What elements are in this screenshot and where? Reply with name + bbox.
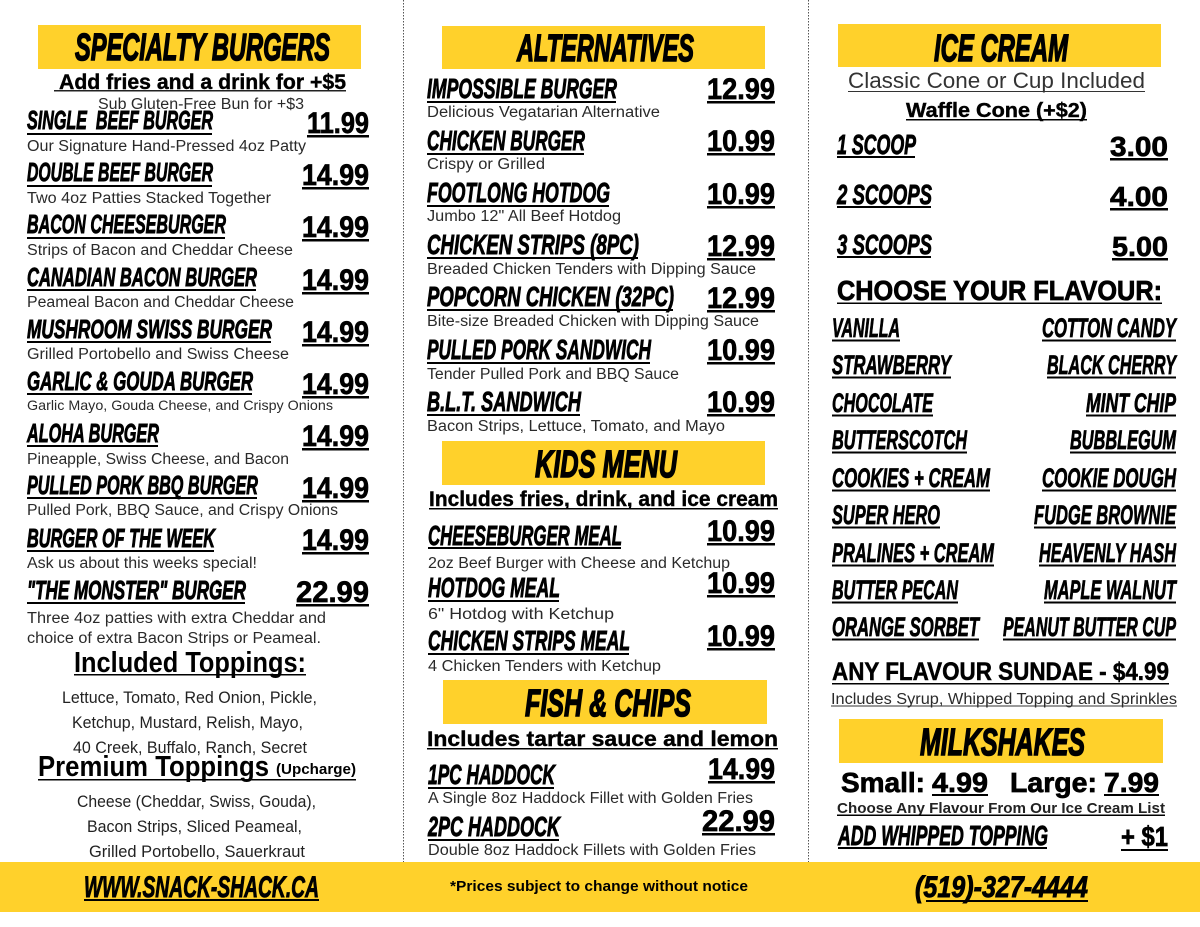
heading: specialty burgers [38,25,361,69]
item: chicken strips: Breaded Chicken Tenders with Dipping Sauce [427,261,756,278]
item: 2pc haddock: 22.99 [702,805,775,838]
item: burger of the week [27,524,369,572]
item: pulled pork sandwich [427,334,775,383]
item: the monster burger: choice of extra Bacon Strips or Peameal. [27,630,321,647]
item: popcorn chicken [427,281,775,330]
item: double beef burger [27,159,369,207]
item: single beef burger: Our Signature Hand-Pressed 4oz Patty [27,138,306,155]
item: single beef burger: 11.99 [307,107,369,140]
item: chicken strips meal: 10.99 [707,620,775,653]
item: impossible burger [427,73,775,121]
item: garlic and gouda burger: Garlic Mayo, Gouda Cheese, and Crispy Onions [27,397,333,413]
heading: ice cream: ICE CREAM [934,28,1069,70]
offer: any flavour sundae: ANY FLAVOUR SUNDAE - $4.99 [832,658,1169,686]
item: burger of the week: 14.99 [302,524,369,557]
item: pulled pork bbq burger: PULLED PORK BBQ BURGER [27,472,258,500]
text: included toppings list: Ketchup, Mustard, Relish, Mayo, [72,714,303,732]
price row: 2 scoops: 2 SCOOPS [836,179,932,210]
item: double beef burger: DOUBLE BEEF BURGER [27,159,213,187]
item: impossible burger: IMPOSSIBLE BURGER [427,73,617,104]
item: mushroom swiss burger [27,316,369,363]
item: blt sandwich: 10.99 [707,386,775,419]
heading: ice cream [838,24,1161,70]
item: pulled pork bbq burger: 14.99 [302,472,369,505]
note: kids meals include: Includes fries, drink, and ice cream [429,488,778,511]
price row: 1 scoop [837,129,1168,162]
item: canadian bacon burger: Peameal Bacon and Cheddar Cheese [27,294,294,311]
item: 1pc haddock [428,753,775,807]
note: add fries and a drink: Add fries and a drink for +$5 [59,71,346,94]
item: burger of the week: BURGER OF THE WEEK [27,525,216,553]
footer: phone number: (519)-327-4444 [915,871,1088,904]
heading: included toppings: Included Toppings: [74,647,306,679]
heading: premium toppings: (Upcharge) [276,761,356,778]
list: flavours left column: COOKIES + CREAM [832,463,990,493]
item: mushroom swiss burger: 14.99 [302,316,369,349]
item: pulled pork sandwich: PULLED PORK SANDWICH [427,334,652,365]
item: aloha burger: 14.99 [302,420,369,453]
heading: milkshakes: MILKSHAKES [920,722,1085,764]
list: flavours left column: PRALINES + CREAM [832,538,994,568]
item: hotdog meal: 6" Hotdog with Ketchup [428,606,614,623]
item: chicken burger: Crispy or Grilled [427,156,545,173]
item: garlic and gouda burger: 14.99 [302,368,369,401]
item: 1pc haddock: 14.99 [708,753,775,786]
heading: kids menu [442,441,765,486]
note: gluten-free bun: Sub Gluten-Free Bun for +$3 [98,96,304,113]
note: choose any flavour: Choose Any Flavour From Our Ice Cream List [837,800,1165,817]
item: the monster burger: "THE MONSTER" BURGER [27,577,246,605]
item: the monster burger: 22.99 [296,576,369,609]
item: impossible burger: Delicious Vegatarian Alternative [427,104,660,121]
item: aloha burger [26,420,369,468]
list: flavours left column: STRAWBERRY [832,350,953,380]
item: cheeseburger meal: 2oz Beef Burger with Cheese and Ketchup [428,555,730,572]
prices: milkshake sizes: 7.99 [1104,767,1159,798]
price row: 1 scoop: 1 SCOOP [837,129,916,160]
prices: milkshake sizes: 4.99 [932,767,988,798]
item: impossible burger: 12.99 [707,73,775,106]
item: canadian bacon burger: 14.99 [302,264,369,297]
heading: alternatives: ALTERNATIVES [516,28,694,70]
footer: price disclaimer: *Prices subject to change without notice [450,879,748,895]
item: single beef burger [27,107,369,155]
prices: milkshake sizes: Small: [841,767,925,798]
text: premium toppings list: Cheese (Cheddar, Swiss, Gouda), [77,793,316,811]
text: premium toppings list: Grilled Portobello, Sauerkraut [89,843,305,861]
panel: alternatives, kids menu, fish and chips column [427,26,778,859]
heading: fish and chips [443,680,767,725]
panel: specialty burgers column [26,25,369,861]
add-on: whipped topping: + $1 [1121,821,1168,852]
item: canadian bacon burger: CANADIAN BACON BURGER [27,264,257,292]
price row: 2 scoops [836,179,1168,212]
item: blt sandwich: B.L.T. SANDWICH [427,386,582,417]
item: hotdog meal [428,567,775,623]
item: hotdog meal: 10.99 [707,567,775,600]
item: cheeseburger meal: CHEESEBURGER MEAL [428,520,622,551]
note: classic cone or cup: Classic Cone or Cup Included [848,68,1145,93]
item: chicken strips meal [428,620,775,675]
item: cheeseburger meal: 10.99 [707,515,775,548]
item: blt sandwich [427,386,775,435]
list: flavours left column: VANILLA [832,313,900,343]
prices: milkshake sizes [841,767,1159,798]
item: footlong hotdog [427,177,775,225]
heading: kids menu: KIDS MENU [535,444,678,486]
price row: 1 scoop: 3.00 [1110,131,1168,162]
item: chicken strips: CHICKEN STRIPS (8PC) [427,229,639,260]
list: flavours right column [1003,313,1178,642]
item: pulled pork bbq burger: Pulled Pork, BBQ Sauce, and Crispy Onions [27,502,338,519]
item: footlong hotdog: 10.99 [707,178,775,211]
item: popcorn chicken: POPCORN CHICKEN (32PC) [427,281,674,312]
price row: 3 scoops [837,229,1168,262]
heading: specialty burgers: SPECIALTY BURGERS [75,27,330,69]
item: popcorn chicken: Bite-size Breaded Chicken with Dipping Sauce [427,313,759,330]
add-on: whipped topping: ADD WHIPPED TOPPING [837,820,1048,851]
list: flavours left column [832,313,994,642]
item: chicken burger: CHICKEN BURGER [427,125,585,156]
list: flavours left column: ORANGE SORBET [832,612,981,642]
item: 1pc haddock: 1PC HADDOCK [428,759,556,790]
item: footlong hotdog: FOOTLONG HOTDOG [427,177,610,208]
item: bacon cheeseburger: BACON CHEESEBURGER [27,211,226,239]
note: tartar sauce and lemon: Includes tartar sauce and lemon [427,728,778,751]
item: canadian bacon burger [27,264,369,311]
heading: fish and chips: FISH & CHIPS [525,683,691,725]
item: popcorn chicken: 12.99 [707,282,775,315]
item: cheeseburger meal [428,515,775,572]
item: aloha burger: ALOHA BURGER [26,420,159,448]
heading: milkshakes [839,719,1163,764]
item: footlong hotdog: Jumbo 12" All Beef Hotdog [427,208,621,225]
note: sundae includes: Includes Syrup, Whipped Topping and Sprinkles [831,691,1177,708]
item: chicken strips [427,229,775,278]
item: chicken strips: 12.99 [707,230,775,263]
item: hotdog meal: HOTDOG MEAL [428,572,560,603]
item: 2pc haddock: 2PC HADDOCK [427,811,561,842]
item: the monster burger: Three 4oz patties with extra Cheddar and [27,610,326,627]
item: bacon cheeseburger: Strips of Bacon and Cheddar Cheese [27,242,293,259]
item: mushroom swiss burger: Grilled Portobello and Swiss Cheese [27,346,289,363]
price row: 3 scoops: 5.00 [1112,231,1168,262]
prices: milkshake sizes: Large: [1010,767,1097,798]
price row: 2 scoops: 4.00 [1110,181,1168,212]
item: mushroom swiss burger: MUSHROOM SWISS BURGER [27,316,272,344]
list: flavours left column: BUTTER PECAN [832,575,958,605]
item: pulled pork sandwich: 10.99 [707,334,775,367]
footer band [0,862,1200,912]
item: pulled pork sandwich: Tender Pulled Pork and BBQ Sauce [427,366,679,383]
text: included toppings list: 40 Creek, Buffalo, Ranch, Secret [73,739,307,757]
price row: 3 scoops: 3 SCOOPS [837,229,932,260]
item: burger of the week: Ask us about this weeks special! [27,555,257,572]
item: single beef burger: SINGLE BEEF BURGER [27,107,213,135]
item: double beef burger: Two 4oz Patties Stacked Together [27,190,271,207]
item: blt sandwich: Bacon Strips, Lettuce, Tomato, and Mayo [427,418,725,435]
item: garlic and gouda burger: GARLIC & GOUDA BURGER [27,368,253,396]
heading: premium toppings: Premium Toppings [38,751,269,783]
list: flavours left column: CHOCOLATE [832,388,934,418]
list: flavours left column: BUTTERSCOTCH [832,425,967,455]
footer: website: WWW.SNACK-SHACK.CA [84,871,319,904]
panel: ice cream and milkshakes column [831,24,1178,852]
item: 2pc haddock [427,805,775,859]
item: chicken burger: 10.99 [707,125,775,158]
item: the monster burger [27,576,369,647]
item: garlic and gouda burger [27,368,369,413]
item: chicken burger [427,125,775,173]
item: pulled pork bbq burger [27,472,369,519]
heading: alternatives [442,26,765,70]
item: double beef burger: 14.99 [302,159,369,192]
item: 2pc haddock: Double 8oz Haddock Fillets with Golden Fries [428,842,756,859]
text: premium toppings list [77,793,316,861]
list: flavours left column: SUPER HERO [832,500,940,530]
text: premium toppings list: Bacon Strips, Sliced Peameal, [87,818,302,836]
note: waffle cone: Waffle Cone (+$2) [906,100,1087,122]
item: chicken strips meal: 4 Chicken Tenders with Ketchup [428,658,661,675]
item: bacon cheeseburger [27,211,369,259]
item: bacon cheeseburger: 14.99 [302,211,369,244]
item: aloha burger: Pineapple, Swiss Cheese, and Bacon [27,451,289,468]
heading: choose your flavour: CHOOSE YOUR FLAVOUR: [837,275,1162,306]
item: 1pc haddock: A Single 8oz Haddock Fillet with Golden Fries [428,790,753,807]
item: chicken strips meal: CHICKEN STRIPS MEAL [428,625,630,656]
text: included toppings list: Lettuce, Tomato, Red Onion, Pickle, [62,689,317,707]
text: included toppings list [62,689,317,757]
